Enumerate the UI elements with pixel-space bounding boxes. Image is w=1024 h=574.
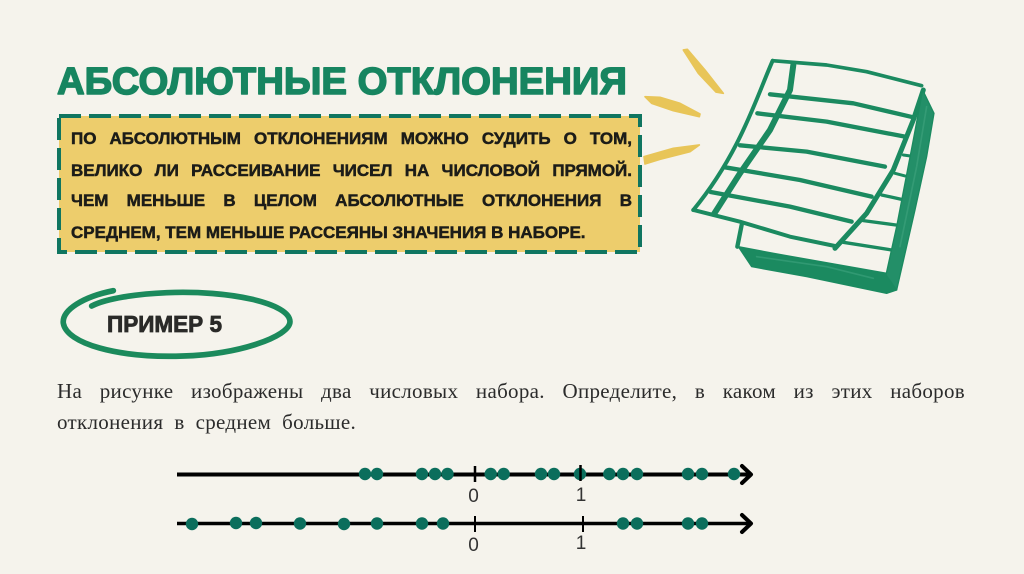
- body text: line 1: На рисунке изображены два числовых набора. Определите, в каком из этих наборов: [57, 379, 965, 403]
- text block: line 2: ВЕЛИКО ЛИ РАССЕИВАНИЕ ЧИСЕЛ НА ЧИСЛОВОЙ ПРЯМОЙ.: [71, 161, 632, 180]
- number line 2: 0: [468, 535, 479, 556]
- title: АБСОЛЮТНЫЕ ОТКЛОНЕНИЯ: [57, 61, 627, 103]
- number line 2: 1: [576, 533, 586, 554]
- body text: line 2: отклонения в среднем больше.: [57, 410, 356, 434]
- text block: line 4: СРЕДНЕМ, ТЕМ МЕНЬШЕ РАССЕЯНЫ ЗНАЧЕНИЯ В НАБОРЕ.: [71, 223, 586, 242]
- hand-drawn oval with label: Пример 5: ПРИМЕР 5: [107, 311, 222, 337]
- text block: line 1: ПО АБСОЛЮТНЫМ ОТКЛОНЕНИЯМ МОЖНО СУДИТЬ О ТОМ,: [71, 129, 632, 148]
- number line 1: 0: [468, 486, 479, 507]
- text block: line 3: ЧЕМ МЕНЬШЕ В ЦЕЛОМ АБСОЛЮТНЫЕ ОТКЛОНЕНИЯ В: [71, 191, 632, 210]
- number line 1: 1: [576, 485, 586, 506]
